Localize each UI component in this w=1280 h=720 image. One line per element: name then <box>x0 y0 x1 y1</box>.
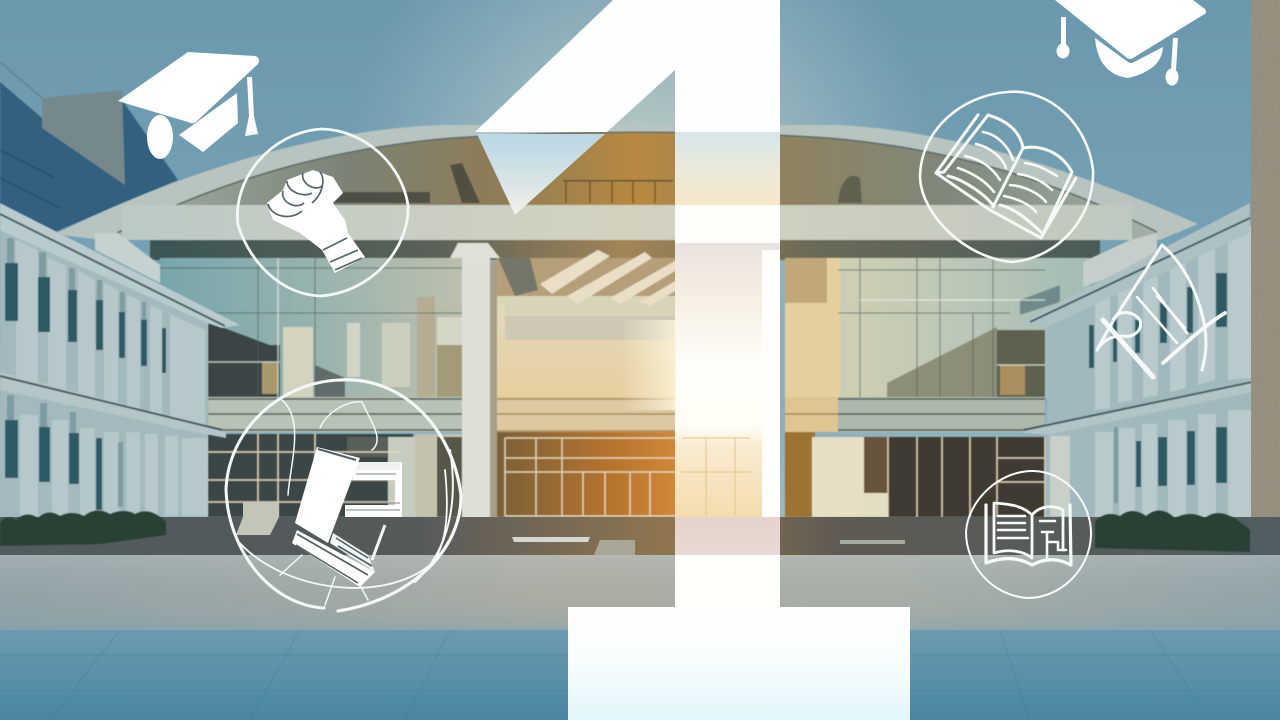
canopy slats <box>540 250 680 306</box>
glazing upper <box>160 258 1045 397</box>
icon: fist in circle <box>237 129 408 296</box>
ground: plaza <box>0 502 1280 720</box>
under-beam shadow <box>150 240 1100 260</box>
number stem over facade <box>675 243 780 517</box>
left lower glass <box>208 434 413 517</box>
foreground pillar at right edge <box>1251 0 1280 552</box>
icon: open book in circle <box>920 92 1093 262</box>
building: left tower <box>0 62 178 232</box>
number flag <box>475 0 780 132</box>
number base <box>568 607 910 720</box>
main column <box>462 250 490 518</box>
number flag lower translucent <box>477 134 605 215</box>
facade seen through stem <box>682 438 750 516</box>
icon: book with symbol in circle <box>966 471 1091 598</box>
book stack right <box>345 462 402 517</box>
main beam <box>122 205 1132 240</box>
icon: graduation cap left <box>118 52 259 159</box>
right upper glass <box>838 258 1090 398</box>
glare spill <box>620 320 676 410</box>
glazing lower <box>208 434 1045 517</box>
right lower glass <box>785 432 815 517</box>
building: right wing <box>1020 203 1252 527</box>
right reflections <box>887 327 997 397</box>
shrubs left <box>0 510 166 546</box>
centre lower glass <box>497 432 687 517</box>
number stem over road <box>675 517 780 555</box>
background: sky <box>0 0 1280 560</box>
roof side bay right <box>1083 233 1157 287</box>
amber pier zone <box>785 258 840 432</box>
centre upper panels <box>497 258 687 398</box>
icon: graduation cap right <box>1055 0 1206 86</box>
building: central hall <box>55 125 1198 518</box>
left upper glass <box>160 258 462 398</box>
number stem over plaza <box>675 555 780 607</box>
left reflections <box>283 327 313 397</box>
big number 1 <box>475 0 910 720</box>
number stem beam crossing <box>675 205 780 243</box>
bright column in stem <box>762 250 780 517</box>
shrubs right <box>1095 510 1250 552</box>
roof <box>55 125 1198 240</box>
icon: scroll and books in circle <box>226 380 461 611</box>
roof side bay left <box>95 233 160 283</box>
icon: sketched drafting symbol <box>1097 245 1225 377</box>
building: left wing <box>0 203 240 520</box>
mid floor band <box>208 397 485 432</box>
roof ribs <box>330 163 862 203</box>
number stem over roof <box>675 132 780 205</box>
